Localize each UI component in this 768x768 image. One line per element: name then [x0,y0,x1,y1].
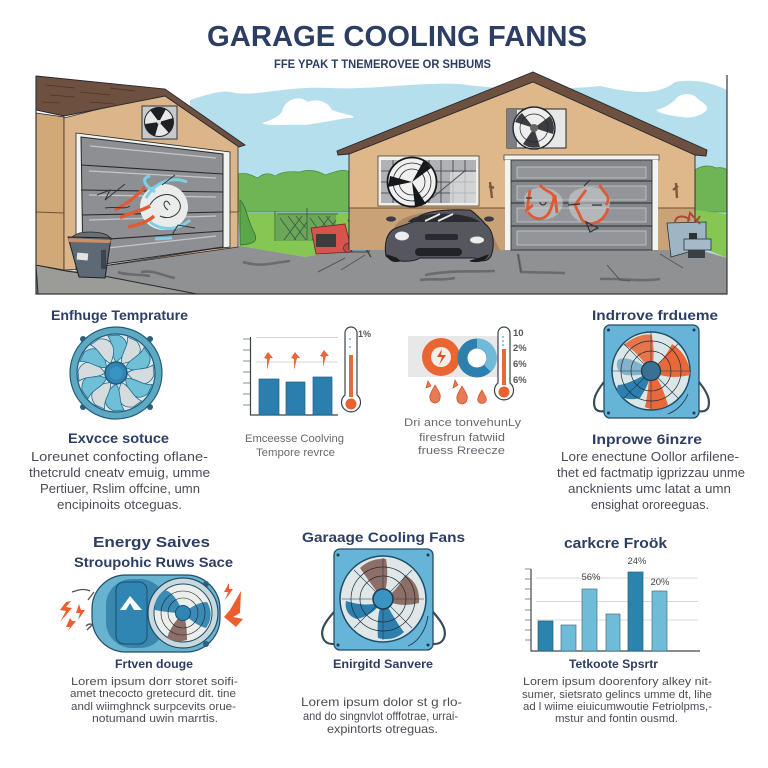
caption: Emceesse Coolving [245,433,344,445]
panel: bar chart summary [522,536,712,725]
hero illustration: two garages [36,72,727,294]
body text [522,676,712,725]
heading line two: Stroupohic Ruws Sace [74,555,234,570]
body text: amet tnecocto gretecurd dit. tine [70,688,236,700]
body text: Lore enectune Oollor arfilene- [561,449,739,464]
bar chart [525,556,700,651]
utility box [667,213,711,258]
left garage side wall [36,113,64,270]
heading: Enfhuge Temprature [51,308,189,323]
caption: Tempore revrce [256,447,335,459]
bar chart [243,337,338,415]
caption: Dri ance tonvehunLy [404,417,522,429]
trash bin [68,232,111,278]
subheading: Enirgitd Sanvere [333,657,433,671]
panel: improve airflow [557,308,745,512]
body text: mstur and fontin ousmd. [555,713,678,725]
body text: ancknients umc latat a umn [568,481,731,496]
caption [245,433,344,459]
icon: box fan [322,549,445,650]
subheading: Tetkoote Spsrtr [569,657,658,671]
gauge icon [408,336,499,378]
subheading: Exvcce sotuce [68,430,169,446]
icon: lightning bolts [60,583,243,631]
heading: Energy Saives [93,534,210,551]
body text [301,695,462,736]
left garage front wall [64,92,238,270]
panel: enhance temperature [29,308,210,512]
thermometer label: 1% [358,329,371,339]
cloud left [262,98,353,125]
subtitle: FFE YPAK T TNEMEROVEE OR SHBUMS [274,59,491,71]
body text [29,449,210,512]
title: GARAGE COOLING FANNS [207,21,587,53]
swirl on left door [97,175,195,239]
left garage roof [36,76,245,147]
body text [557,449,745,512]
body text: ensighat ororeeguas. [591,497,709,512]
panel: garage cooling fans [301,529,465,736]
caption: firesfrun fatwiid [419,432,505,444]
right garage [337,72,711,262]
fence [275,208,338,241]
body text: Lorem ipsum dolor st g rlo- [301,695,462,709]
generator and barrel [311,220,372,257]
barrel [350,222,372,252]
subheading: Inprowe 6inzre [592,431,702,447]
icon: round fan [70,327,162,419]
body text: thetcruld cneatv emuig, umme [29,465,210,480]
body text: expintorts otreguas. [327,722,438,736]
bar chart: 24% [627,556,647,567]
right garage roof [337,72,707,156]
drops [426,380,486,404]
panel: energy saves [60,534,243,725]
caption [404,417,522,457]
driveway [36,246,727,294]
icon: portable fan unit [72,575,220,652]
panel: cooling bar chart [243,327,371,459]
car [385,210,494,262]
thermometer scale: 6% [513,359,527,370]
flame marks on door [524,180,610,232]
heading: Indrrove frdueme [592,308,719,323]
bar chart: 20% [650,577,670,588]
body text: andl wiimghnck surpcevits orue- [71,701,236,713]
thermometer scale: 6% [513,375,527,386]
body text: and do singnvlot offfotrae, urrai- [303,709,458,723]
thermometer scale [513,328,527,386]
body text: Loreunet confocting oflane- [31,449,208,464]
trees [238,170,350,212]
generator [311,224,352,254]
driveway cracks [118,254,683,281]
body text: ad l wiime eiuicumwoutie Fetriolpms,- [523,701,712,713]
body text: sumer, sietsrato gelincs umme dt, lihe [522,689,712,701]
window with fan [378,156,479,206]
body text: notumand uwin marrtis. [92,713,218,725]
car shadow on wall [385,211,500,250]
cloud right [656,94,707,118]
body text: Lorem ipsum doorenfory alkey nit- [523,676,712,688]
caption: fruess Rreecze [418,445,505,457]
body text: Lorem ipsum dorr storet soifi- [71,676,238,688]
left garage door [76,133,230,270]
body text: thet ed factmatip igprizzau unme [557,465,745,480]
thermometer scale: 2% [513,343,527,354]
panel: drip and ring gauge [404,327,527,457]
body text: encipinoits otceguas. [57,497,182,512]
wall lamps [489,182,678,198]
thermometer [495,327,514,400]
thermometer scale: 10 [513,328,524,339]
body text [70,676,238,725]
heading: carkcre Froök [564,536,668,552]
bar chart: 56% [581,572,601,583]
right garage door [504,155,659,250]
icon: box fan [594,325,709,418]
right garage wall [349,80,695,250]
sky [190,81,727,294]
body text: Pertiuer, Rslim offcine, umn [40,481,200,496]
subheading: Frtven douge [115,657,193,671]
scene frame [36,75,727,294]
heading: Garaage Cooling Fans [302,529,465,545]
right vent fan [507,107,566,149]
shrub [240,200,256,245]
left garage [36,76,245,278]
lawn [238,213,350,257]
left vent fan [142,106,177,139]
thermometer [342,327,360,412]
